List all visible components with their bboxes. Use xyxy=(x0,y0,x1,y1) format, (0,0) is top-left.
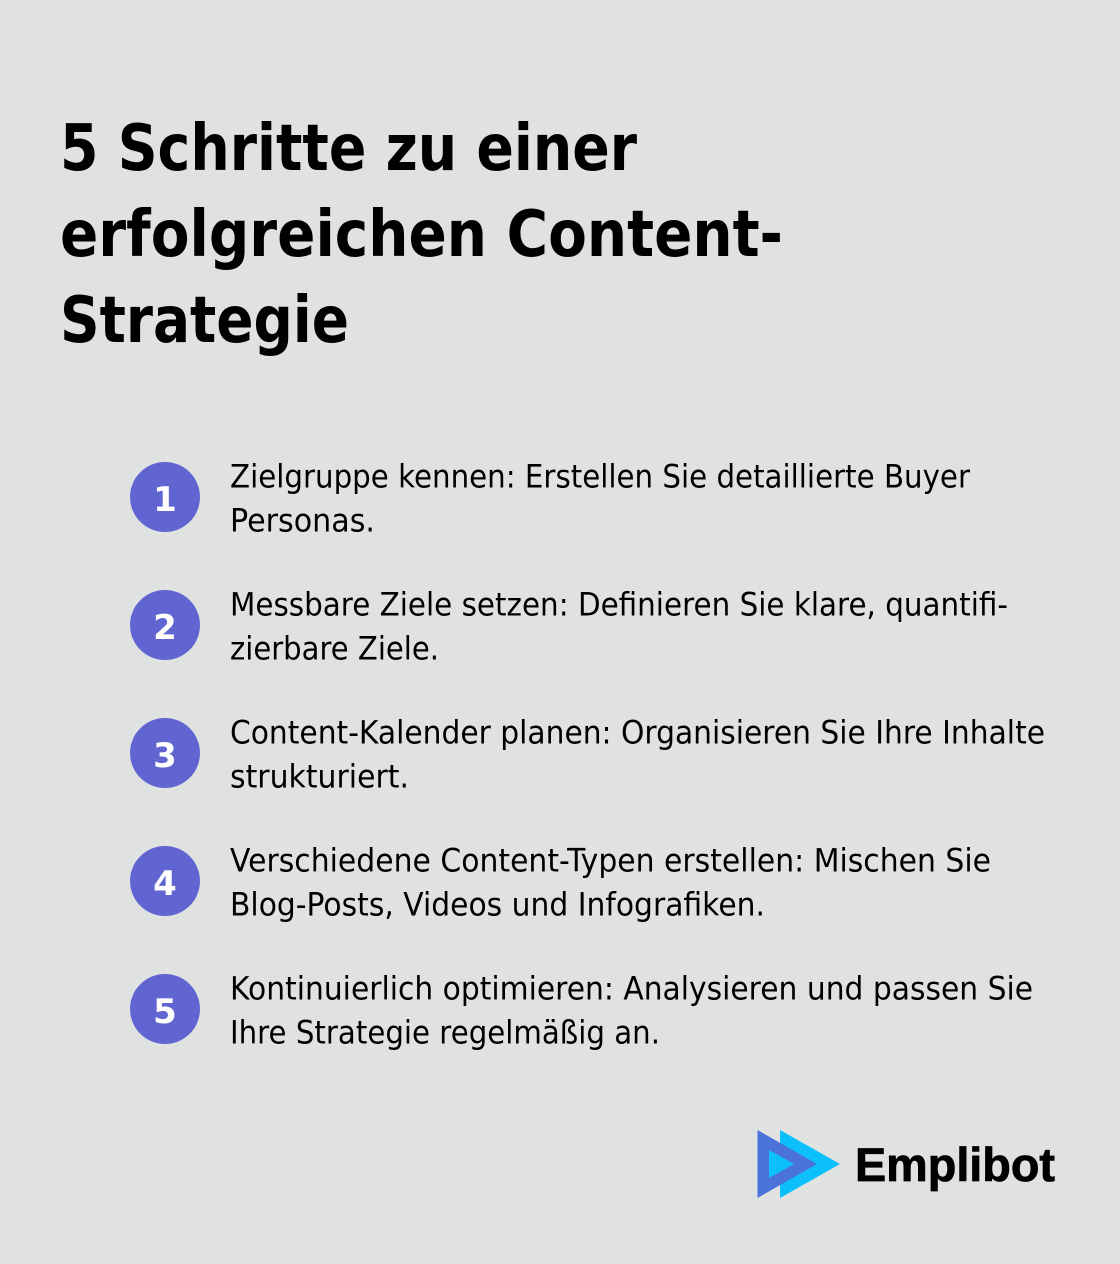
number badge 1 xyxy=(130,462,200,532)
step 2 text: Messbare Ziele setzen: Definieren Sie klare, quantifi- xyxy=(230,586,1008,624)
step 4 text: Blog-Posts, Videos und Infografiken. xyxy=(230,886,765,924)
icon: play triangles xyxy=(758,1130,840,1198)
number badge 2: 2 xyxy=(153,608,177,648)
step 4 xyxy=(130,842,991,924)
title: erfolgreichen Content- xyxy=(60,197,783,272)
number badge 4: 4 xyxy=(153,864,177,904)
step 3 text: strukturiert. xyxy=(230,758,409,796)
number badge 5: 5 xyxy=(153,992,177,1032)
number badge 4 xyxy=(130,846,200,916)
number badge 1: 1 xyxy=(153,480,177,520)
logo: Emplibot xyxy=(758,1130,1055,1198)
number badge 3: 3 xyxy=(153,736,177,776)
step 3 text: Content-Kalender planen: Organisieren Sie Ihre Inhalte xyxy=(230,714,1045,752)
title: 5 Schritte zu einer xyxy=(60,111,637,186)
step 4 text: Verschiedene Content-Typen erstellen: Mischen Sie xyxy=(230,842,991,880)
step 2 text: zierbare Ziele. xyxy=(230,630,439,668)
step 2 xyxy=(130,586,1008,668)
step 5 xyxy=(130,970,1033,1052)
title xyxy=(60,111,783,358)
step 3 text xyxy=(230,714,1045,796)
step 5 text: Ihre Strategie regelmäßig an. xyxy=(230,1014,660,1052)
step 1 text xyxy=(230,458,971,540)
step 4 text xyxy=(230,842,991,924)
number badge 2 xyxy=(130,590,200,660)
step 2 text xyxy=(230,586,1008,668)
step 5 text: Kontinuierlich optimieren: Analysieren und passen Sie xyxy=(230,970,1033,1008)
logo wordmark: Emplibot xyxy=(855,1138,1055,1191)
step 3 xyxy=(130,714,1045,796)
number badge 5 xyxy=(130,974,200,1044)
step 1 text: Personas. xyxy=(230,502,375,540)
step 1 xyxy=(130,458,971,540)
title: Strategie xyxy=(60,283,349,358)
number badge 3 xyxy=(130,718,200,788)
step 1 text: Zielgruppe kennen: Erstellen Sie detaillierte Buyer xyxy=(230,458,971,496)
step 5 text xyxy=(230,970,1033,1052)
